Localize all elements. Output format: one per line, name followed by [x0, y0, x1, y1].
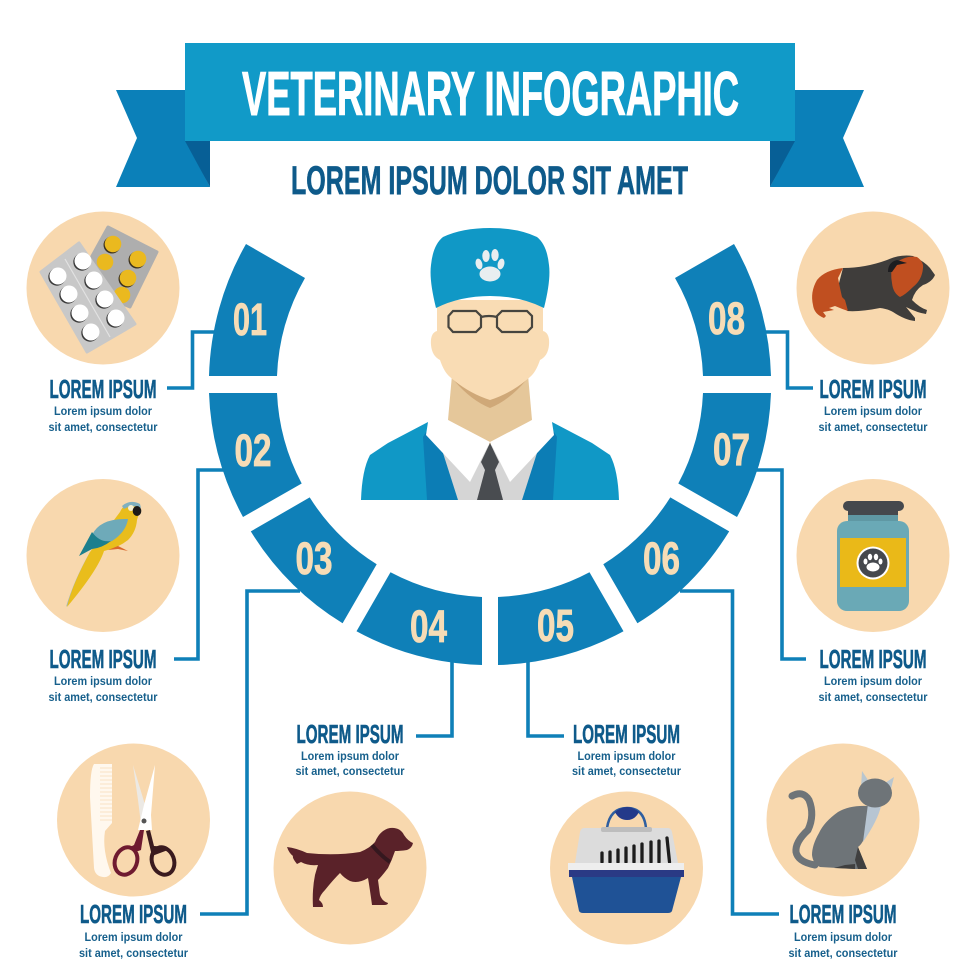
segment 05 — [498, 572, 624, 665]
face — [431, 300, 549, 400]
label: Lorem ipsum dolor — [824, 406, 922, 418]
panel 07: medicine jar — [796, 479, 950, 704]
neck — [448, 375, 532, 445]
segment 07: 07 — [713, 424, 750, 475]
circle — [26, 212, 180, 364]
icon: cat — [792, 771, 894, 869]
label — [818, 374, 928, 434]
label — [572, 719, 681, 778]
label: Lorem ipsum dolor — [54, 676, 152, 688]
icon: guinea pig — [812, 256, 935, 321]
ribbon left tail — [116, 90, 210, 187]
ring of numbered segments — [209, 244, 771, 665]
label: Lorem ipsum dolor — [301, 751, 399, 763]
panel 04: dog — [274, 719, 426, 944]
ribbon right tail — [770, 90, 864, 187]
segment 03 — [251, 497, 377, 623]
label: LOREM IPSUM — [50, 644, 156, 674]
label: sit amet, consectetur — [788, 948, 898, 960]
ribbon left fold — [185, 141, 210, 187]
segment 01: 01 — [233, 294, 267, 345]
ribbon right fold — [770, 141, 795, 187]
circle — [766, 744, 920, 896]
label: LOREM IPSUM — [573, 719, 680, 749]
cap — [431, 228, 549, 308]
segment 04 — [356, 572, 482, 665]
tie — [477, 443, 503, 500]
ribbon band — [185, 43, 795, 141]
icon: scissors — [111, 765, 178, 878]
segment 02 — [209, 393, 302, 517]
segment 06 — [603, 497, 729, 623]
segment 05: 05 — [537, 600, 574, 651]
segment 02: 02 — [234, 425, 272, 476]
label: Lorem ipsum dolor — [578, 751, 676, 763]
segment 07 — [678, 393, 771, 517]
segment 08: 08 — [708, 293, 745, 344]
label: LOREM IPSUM — [296, 719, 404, 749]
label: Lorem ipsum dolor — [54, 406, 152, 418]
circle — [796, 212, 950, 364]
label: Lorem ipsum dolor — [84, 932, 183, 944]
segment 04: 04 — [410, 601, 447, 652]
segment 06: 06 — [643, 533, 680, 584]
label — [788, 899, 898, 960]
collar — [426, 420, 554, 482]
label — [48, 644, 158, 704]
circle — [274, 792, 426, 944]
icon: parrot — [66, 502, 141, 607]
panel 01: pills — [26, 212, 180, 434]
subtitle: LOREM IPSUM DOLOR SIT AMET — [291, 159, 688, 203]
label: LOREM IPSUM — [80, 899, 187, 929]
panel 06: cat — [766, 744, 920, 960]
shirt — [443, 445, 537, 500]
label — [818, 644, 928, 704]
lapels — [423, 432, 557, 500]
label: sit amet, consectetur — [48, 422, 158, 434]
label — [79, 899, 188, 960]
icon: veterinarian — [361, 228, 619, 500]
label — [48, 374, 158, 434]
circle — [796, 479, 950, 632]
label: Lorem ipsum dolor — [824, 676, 922, 688]
label: sit amet, consectetur — [572, 766, 681, 778]
icon: blister packs — [41, 227, 157, 352]
icon: comb — [90, 764, 112, 877]
segment 08 — [675, 244, 771, 376]
glasses — [448, 311, 532, 332]
circle — [57, 744, 210, 896]
icon: carrier — [568, 807, 684, 913]
label: sit amet, consectetur — [48, 692, 158, 704]
label — [296, 719, 405, 778]
segment 03: 03 — [296, 533, 332, 584]
label: Lorem ipsum dolor — [794, 932, 892, 944]
circle — [550, 792, 703, 944]
suit — [361, 422, 619, 500]
icon: jar — [837, 501, 909, 611]
label: sit amet, consectetur — [818, 422, 928, 434]
label: LOREM IPSUM — [790, 899, 896, 929]
panel 02: parrot — [26, 479, 180, 704]
connector lines — [167, 332, 813, 914]
segment 01 — [209, 244, 305, 376]
panel 05: pet carrier — [550, 719, 703, 944]
label: sit amet, consectetur — [818, 692, 928, 704]
icon: dog — [287, 828, 413, 907]
label: sit amet, consectetur — [79, 948, 188, 960]
paw on cap — [474, 249, 506, 282]
panel 08: guinea pig — [796, 212, 950, 434]
label: sit amet, consectetur — [296, 766, 405, 778]
circle — [26, 479, 180, 632]
panel 03: comb and scissors — [57, 744, 210, 960]
label: LOREM IPSUM — [50, 374, 156, 404]
title ribbon — [116, 43, 864, 187]
